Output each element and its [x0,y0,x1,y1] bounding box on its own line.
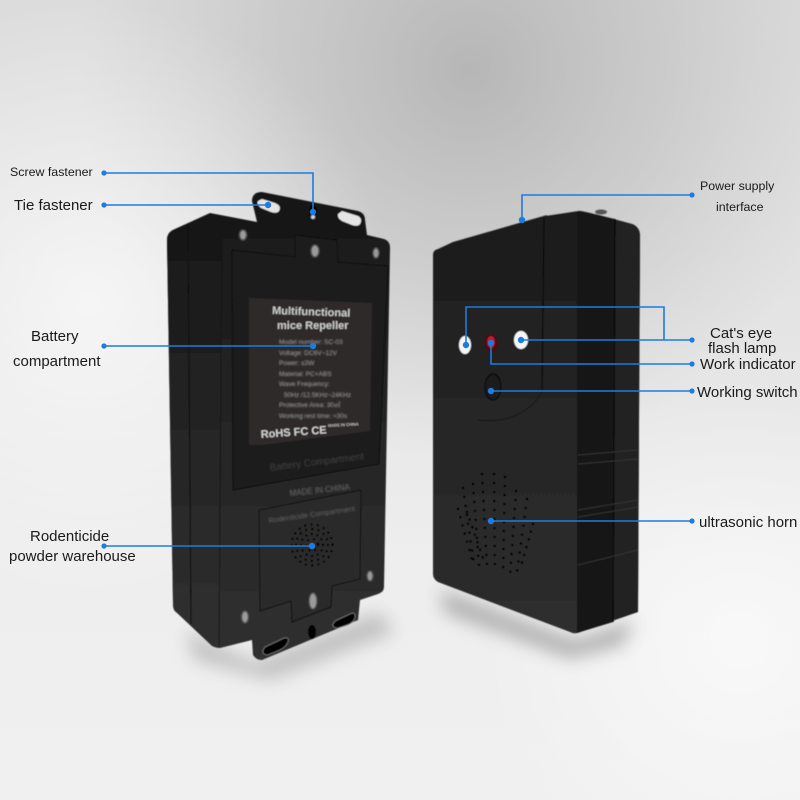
dark side strip [577,211,615,633]
battery compartment cover [232,235,388,490]
specification label: Power: ≤3W [279,360,315,367]
specification label: mice Repeller [277,320,349,332]
specification label: Protective Area: 30㎡ [279,400,341,409]
callouts [101,170,695,549]
red indicator core [487,336,495,348]
specification label: Material: PC+ABS [279,371,332,378]
label: ultrasonic horn: ultrasonic horn [699,514,797,531]
callout: screw fastener [101,170,316,215]
cat's eye lamp right [514,331,528,349]
label: cat's eye flash lamp: flash lamp [708,340,776,357]
callout: ultrasonic horn [488,518,695,524]
device body [433,210,640,633]
top highlight [547,210,600,215]
label: work indicator: Work indicator [700,356,796,373]
specification label: 50Hz /12.5KHz~24KHz [284,392,351,399]
label: working switch: Working switch [697,384,798,401]
labels [9,165,798,565]
label: cat's eye flash lamp: Cat's eye [710,325,772,342]
specification label: Wave Frequency: [279,381,330,388]
made in china caption: MADE IN CHINA [289,483,351,498]
speaker holes: left [292,524,332,566]
callout: rodenticide powder warehouse [101,543,315,549]
specification label: Working rest time: ≈30s [279,413,348,420]
label: battery compartment: Battery [31,328,79,345]
label: battery compartment: compartment [13,353,101,370]
rodenticide compartment caption: Rodenticide Compartment [268,504,356,525]
specification label: Multifunctional [272,305,350,320]
specification label: MADE IN CHINA [328,421,359,428]
power interface [595,210,607,214]
specification label: Model number: SC-03 [279,339,343,346]
callout: battery compartment [101,343,316,349]
label: power supply interface: Power supply [700,179,775,193]
label: rodenticide powder warehouse: Rodenticide [30,528,109,545]
shadow: right device [440,590,635,658]
device: back view with label and compartments [167,192,390,660]
label: tie fastener: Tie fastener [14,197,93,214]
device: front view with lamps and horn [433,210,640,633]
bottom mounting holes [263,613,355,655]
callout: tie fastener [101,202,271,208]
callout: power supply interface [519,192,695,223]
battery compartment caption: Battery Compartment [269,451,365,474]
specification label: Voltage: DC6V~12V [279,350,338,357]
mounting tab top holes [257,199,361,226]
callout: working switch [488,388,695,394]
specification label: RoHS FC CE [260,424,327,441]
label: screw fastener: Screw fastener [10,165,93,179]
specification label [249,298,372,445]
device side edge [167,219,222,647]
front seam [542,218,544,393]
working switch [485,374,501,400]
callout: work indicator [488,340,695,367]
label: rodenticide powder warehouse: powder warehouse [9,548,136,565]
callout: cat's eye flash lamp [463,307,695,348]
shadow: left device [185,612,395,680]
device body [167,192,390,660]
side panel [577,210,640,633]
screws [240,230,379,623]
speaker holes: right [458,474,533,576]
rodenticide compartment cover [259,490,361,622]
side ribs [578,450,638,565]
cat's eye lamp left [459,336,471,354]
red work indicator [484,334,498,352]
label: power supply interface: interface [716,200,764,214]
